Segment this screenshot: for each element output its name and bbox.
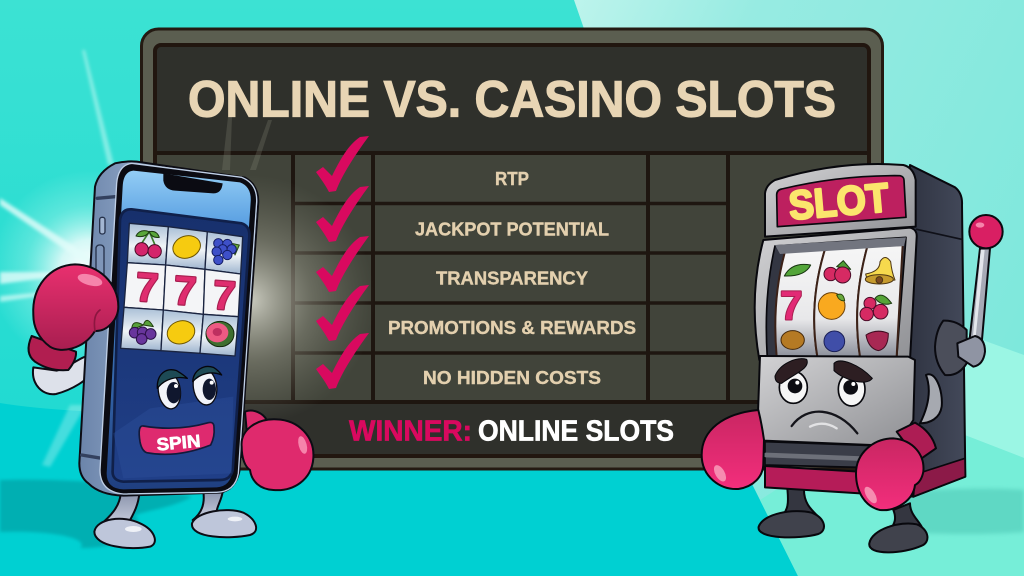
character: slot machine (702, 164, 1003, 552)
title: ONLINE VS. CASINO SLOTS (188, 70, 836, 128)
checkmarks (316, 136, 369, 389)
phone shadow on floor (0, 480, 192, 548)
lower panel (113, 209, 249, 482)
board (142, 29, 882, 469)
left leg (98, 493, 139, 527)
icon: sevens: 7 (134, 264, 160, 311)
phone notch (163, 173, 223, 193)
icons on reels (780, 257, 895, 352)
icon: plum grapes (129, 320, 156, 344)
label: jackpot potential: JACKPOT POTENTIAL (415, 218, 609, 240)
right foot (192, 510, 256, 537)
boxing glove right (242, 419, 313, 490)
spin button: SPIN (156, 431, 201, 455)
icon: orange (818, 293, 845, 319)
label: RTP: RTP (495, 168, 529, 189)
winner line (349, 416, 674, 448)
reel window (766, 237, 906, 358)
icon: bell (865, 257, 895, 284)
spin button (139, 422, 214, 455)
reel grid (121, 223, 243, 356)
machine shadow on floor (890, 489, 1024, 534)
left leg (778, 488, 820, 520)
phone side (79, 161, 258, 496)
left glove (702, 410, 764, 489)
right glove (856, 423, 936, 510)
left arm (33, 356, 97, 394)
left foot (94, 519, 155, 548)
right leg (193, 492, 223, 520)
eyes (156, 366, 222, 410)
right leg (890, 503, 922, 530)
character: phone (29, 161, 313, 548)
sad face (775, 359, 872, 433)
icon: check 3 (316, 236, 369, 292)
icon: sevens: 7 (211, 272, 237, 319)
face panel (757, 356, 915, 446)
table cells (157, 153, 867, 402)
icon: cherries (135, 231, 161, 258)
phone screen (107, 171, 251, 489)
arm behind (920, 374, 942, 423)
label: transparency: TRANSPARENCY (436, 268, 589, 288)
lower body (765, 442, 898, 468)
sign: SLOT (787, 174, 891, 229)
right foot (869, 523, 927, 552)
marquee frame (765, 164, 916, 237)
icon: check 5 (316, 333, 369, 389)
icon: berry (866, 331, 888, 351)
icon: plum (824, 331, 845, 352)
machine side (897, 165, 965, 497)
reels (775, 245, 903, 357)
lever (935, 215, 1003, 375)
icon: lemon (170, 232, 203, 262)
icon: cherries 2 (860, 295, 892, 321)
icon: guava (206, 321, 234, 347)
phone bezel (100, 163, 257, 494)
reel frame (755, 228, 917, 360)
icon: nut (781, 331, 804, 349)
icon: check 4 (316, 285, 369, 341)
right glove back thumb (245, 411, 267, 430)
crimson base (765, 466, 915, 497)
icon: grapes (212, 239, 239, 265)
icon: lemon 2 (164, 317, 198, 347)
side base stripe (913, 458, 965, 497)
icon: seven: 7 (780, 282, 803, 328)
label: no hidden costs: NO HIDDEN COSTS (423, 367, 601, 388)
icon: leaf (784, 264, 811, 276)
label: promotions and rewards: PROMOTIONS & REWARDS (388, 317, 636, 338)
icon: sevens (134, 264, 237, 319)
boxing glove left (29, 264, 118, 370)
winner line: ONLINE SLOTS (478, 416, 674, 448)
icon: check 2 (316, 186, 369, 242)
row labels (388, 168, 636, 388)
icon: sevens: 7 (172, 267, 198, 314)
left foot (759, 511, 824, 537)
icon: cherries (824, 261, 851, 283)
winner line: WINNER: (349, 416, 472, 448)
icon: check 1 (316, 136, 369, 192)
